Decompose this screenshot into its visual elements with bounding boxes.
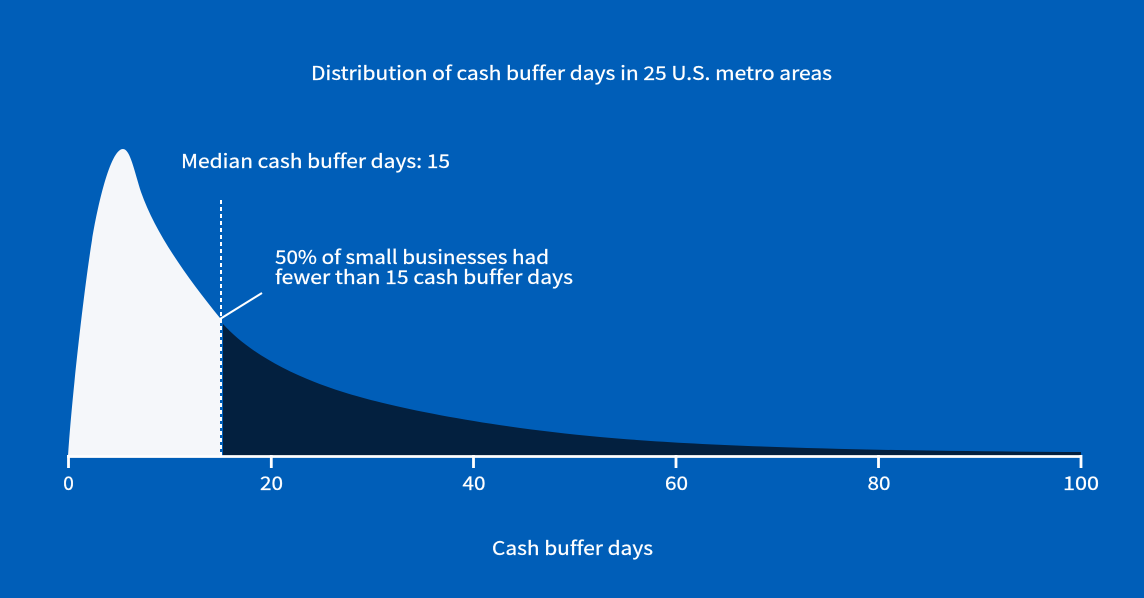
x axis: 0 [63, 469, 74, 496]
x axis title: Cash buffer days [492, 534, 653, 561]
x axis: 60 [665, 469, 688, 496]
x axis: 80 [868, 469, 890, 496]
callout text: fewer than 15 cash buffer days [275, 263, 573, 290]
median label: Median cash buffer days: 15 [181, 147, 450, 174]
median dashed line [220, 200, 222, 456]
callout text [275, 243, 573, 290]
callout leader line [220, 293, 262, 319]
x axis: 20 [260, 469, 283, 496]
callout text: 50% of small businesses had [275, 243, 549, 270]
x axis: 40 [462, 469, 486, 496]
area: above median [223, 324, 1081, 456]
chart: distribution of cash buffer days [68, 149, 1081, 456]
area: below median [68, 149, 220, 456]
x axis: 100 [1063, 469, 1099, 496]
title: Distribution of cash buffer days in 25 U.S. metro areas [311, 59, 832, 86]
x axis [63, 455, 1099, 496]
